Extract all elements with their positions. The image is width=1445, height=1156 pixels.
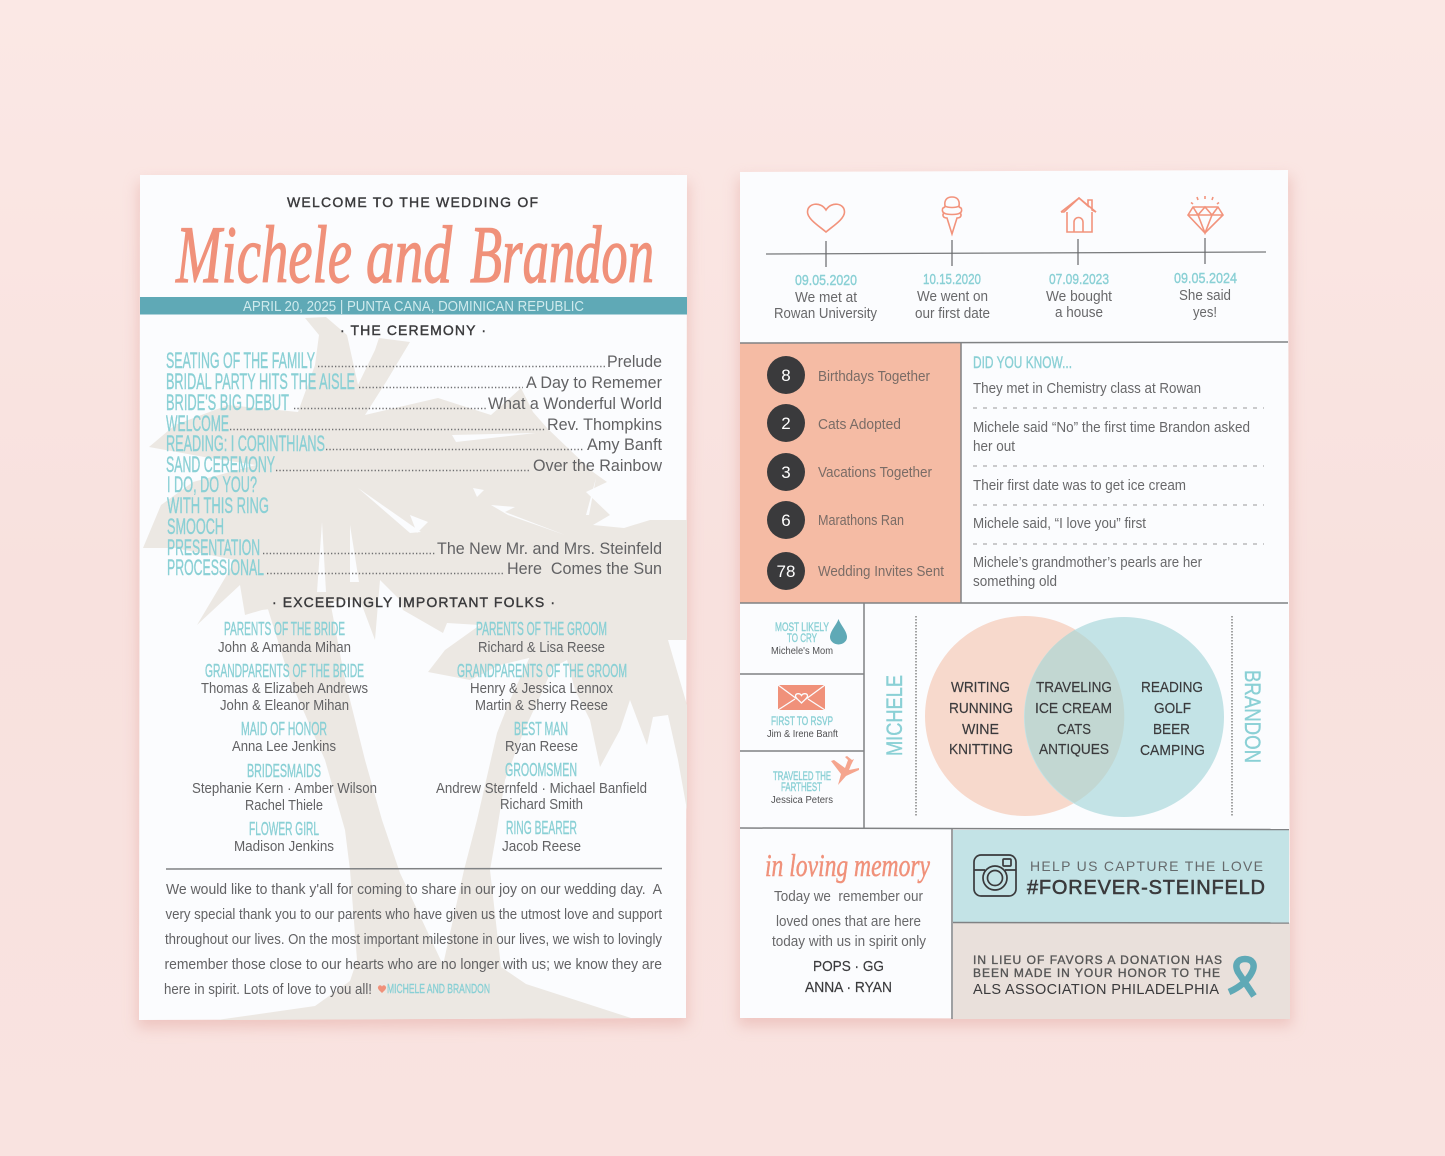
panel: did you know: Michele said, “I love you” first [973,516,1146,532]
timeline [766,196,1266,322]
panel: most likely to cry [771,619,847,657]
wedding party: bride side: Thomas & Elizabeh Andrews [201,681,368,697]
panel: donation note: ALS ASSOCIATION PHILADELPHIA [973,982,1219,998]
ceremony order list: Over the Rainbow [533,456,663,475]
panel: did you know: They met in Chemistry class at Rowan [973,381,1201,397]
thank you message: MICHELE AND BRANDON [387,981,490,996]
icon: awareness ribbon [1229,959,1254,996]
timeline: Rowan University [774,306,878,322]
venn diagram: CATS [1057,721,1091,738]
panel: first to RSVP [767,685,838,740]
panel: did you know: Their first date was to get ice cream [973,478,1186,494]
thank you message: very special thank you to our parents who have given us the utmost love and support [166,907,662,923]
venn diagram [925,616,1224,817]
panel: first to RSVP: Jim & Irene Banft [767,729,838,740]
wedding party: groom side: Andrew Sternfeld · Michael Banfield [436,781,647,797]
venn diagram: KNITTING [949,741,1013,758]
panel: in loving memory [765,847,931,996]
label: Brandon: BRANDON [1240,670,1265,763]
ceremony order list: What a Wonderful World [488,394,662,413]
timeline: 07.09.2023 [1049,271,1109,288]
wedding party: groom side: Ryan Reese [505,739,578,755]
panel: stats: 8 [781,366,791,385]
icon: instagram camera [974,855,1016,896]
panel: stats: Marathons Ran [818,513,904,529]
timeline: She said [1179,288,1231,304]
icon: heart [808,204,844,232]
wedding party: bride side: BRIDESMAIDS [247,761,321,781]
wedding party: groom side: Richard Smith [500,797,583,813]
ceremony order list: Here Comes the Sun [507,559,662,578]
title: Michele and Brandon script: Brandon [470,209,654,300]
ceremony order list: PRESENTATION [167,535,260,560]
panel: stats: Cats Adopted [818,417,901,433]
wedding party: bride side: Anna Lee Jenkins [232,739,336,755]
label: Michele: MICHELE [882,675,907,756]
panel: did you know: her out [973,439,1015,455]
wedding party: bride side: Stephanie Kern · Amber Wilson [192,781,377,797]
ceremony order list: WELCOME [166,411,229,436]
date and location banner [140,297,687,315]
panel: stats: 3 [781,463,791,482]
panel: stats: Wedding Invites Sent [818,564,944,580]
timeline: 10.15.2020 [923,271,981,288]
panel: in loving memory: ANNA · RYAN [805,979,892,996]
timeline: We bought [1046,289,1112,305]
panel: infographic card [740,170,1290,1019]
wedding party: groom side: Richard & Lisa Reese [478,640,605,656]
wedding party: bride side: GRANDPARENTS OF THE BRIDE [205,661,364,681]
panel: traveled the farthest [771,756,859,806]
panel: did you know: DID YOU KNOW... [973,353,1072,372]
panel: stats: Birthdays Together [818,369,930,385]
icon: house [1061,198,1096,232]
venn diagram: WRITING [951,679,1010,696]
venn diagram: ANTIQUES [1039,741,1109,758]
panel: donation note: BEEN MADE IN YOUR HONOR TO THE [973,966,1220,980]
wedding party: groom side: Henry & Jessica Lennox [470,681,614,697]
heading: welcome line: WELCOME TO THE WEDDING OF [287,194,538,210]
venn diagram: RUNNING [949,700,1013,717]
timeline: We went on [917,289,988,305]
thank you message [164,882,663,998]
panel: instagram hashtag [953,830,1289,922]
panel: stats: 6 [781,511,791,530]
ceremony order list [166,348,663,580]
ceremony order list: Amy Banft [587,435,662,454]
venn diagram: ICE CREAM [1035,700,1112,717]
panel: in loving memory: loved ones that are here [776,914,921,930]
wedding party: bride side [192,619,377,855]
thank you message: We would like to thank y'all for coming to share in our joy on our wedding day. A [166,882,662,898]
wedding party: groom side: Jacob Reese [502,839,581,855]
panel: did you know: Michele said “No” the first time Brandon asked [973,420,1250,436]
heading: the ceremony: · THE CEREMONY · [340,322,486,338]
wedding party: bride side: John & Amanda Mihan [218,640,351,656]
timeline: yes! [1193,305,1217,321]
wedding party: groom side: RING BEARER [506,818,577,838]
panel: most likely to cry: TO CRY [787,631,817,645]
timeline: 09.05.2020 [795,272,857,289]
panel: stats: 78 [777,562,795,581]
wedding party: bride side: Rachel Thiele [245,798,323,814]
wedding party: bride side: Madison Jenkins [234,839,334,855]
thank you message: throughout our lives. On the most important milestone in our lives, we wish to lovingly [165,932,663,948]
wedding party: groom side: GROOMSMEN [505,760,577,780]
ceremony order list: SAND CEREMONY [166,452,275,477]
panel: ceremony program card [139,175,687,1020]
venn diagram: TRAVELING [1036,679,1112,696]
venn diagram: WINE [962,721,999,738]
panel: in loving memory: Today we remember our [774,889,923,905]
palm tree silhouette [143,317,687,1020]
icon: envelope with heart [778,685,825,710]
venn diagram: READING [1141,679,1203,696]
wedding party: groom side: BEST MAN [514,719,568,739]
panel: in loving memory: POPS · GG [813,958,884,975]
panel: first to RSVP: FIRST TO RSVP [771,714,833,728]
wedding party: groom side: GRANDPARENTS OF THE GROOM [457,661,627,681]
timeline: our first date [915,306,990,322]
panel: instagram hashtag: #FOREVER-STEINFELD [1027,877,1265,899]
panel: in loving memory: in loving memory [765,847,931,883]
ceremony order list: BRIDE'S BIG DEBUT [166,390,289,415]
title: Michele and Brandon script: Michele [175,209,352,300]
venn diagram: GOLF [1154,700,1191,717]
title: Michele and Brandon script: and [366,209,453,300]
wedding party: bride side: PARENTS OF THE BRIDE [224,619,345,639]
ceremony order list: READING: I CORINTHIANS [166,431,325,456]
panel: traveled the farthest: FARTHEST [781,780,822,794]
panel: traveled the farthest: TRAVELED THE [773,769,831,783]
title: Michele and Brandon script [175,209,654,300]
heading: exceedingly important folks: · EXCEEDINGLY IMPORTANT FOLKS · [272,594,555,610]
ceremony order list: A Day to Rememer [526,373,662,392]
wedding party: bride side: FLOWER GIRL [249,819,319,839]
ceremony order list: I DO, DO YOU? [167,472,257,497]
venn diagram: BEER [1153,721,1190,738]
ceremony order list: WITH THIS RING [167,493,269,518]
timeline: We met at [795,290,857,306]
icon: diamond ring [1188,196,1223,233]
ceremony order list: Prelude [607,352,662,371]
wedding party: groom side: PARENTS OF THE GROOM [476,619,607,639]
panel: donation note [953,923,1290,1019]
icon: ice cream [942,197,962,234]
venn diagram: CAMPING [1140,742,1205,759]
thank you message: remember those close to our hearts who are no longer with us; we know they are [164,957,662,973]
panel: most likely to cry: Michele's Mom [771,646,833,657]
icon: small heart [378,985,386,993]
panel: stats: Vacations Together [818,465,932,481]
panel: stats [740,343,961,603]
ceremony order list: SEATING OF THE FAMILY [166,348,315,373]
wedding party: groom side: Martin & Sherry Reese [475,698,608,714]
wedding party: groom side [436,619,647,855]
wedding party: bride side: MAID OF HONOR [241,719,327,739]
icon: tear drop [830,619,847,644]
icon: airplane [831,756,859,785]
date and location banner: APRIL 20, 2025 | PUNTA CANA, DOMINICAN REPUBLIC [243,299,584,315]
wedding party: bride side: John & Eleanor Mihan [220,698,349,714]
panel: traveled the farthest: Jessica Peters [771,795,833,806]
ceremony order list: PROCESSIONAL [167,555,264,580]
ceremony order list: SMOOCH [167,514,224,539]
panel: instagram hashtag: HELP US CAPTURE THE LOVE [1030,858,1263,874]
timeline: a house [1055,305,1103,321]
timeline: 09.05.2024 [1174,270,1237,287]
thank you message: here in spirit. Lots of love to you all! [164,982,372,998]
panel: in loving memory: today with us in spirit only [772,934,927,950]
panel: did you know [973,353,1264,590]
panel: did you know: Michele’s grandmother’s pearls are her [973,555,1202,571]
ceremony order list: The New Mr. and Mrs. Steinfeld [437,539,662,558]
ceremony order list: Rev. Thompkins [547,415,662,434]
ceremony order list: BRIDAL PARTY HITS THE AISLE [166,369,355,394]
panel: donation note: IN LIEU OF FAVORS A DONATION HAS [973,953,1222,967]
panel: most likely to cry: MOST LIKELY [775,620,829,634]
panel: stats: 2 [781,414,791,433]
panel: did you know: something old [973,574,1057,590]
